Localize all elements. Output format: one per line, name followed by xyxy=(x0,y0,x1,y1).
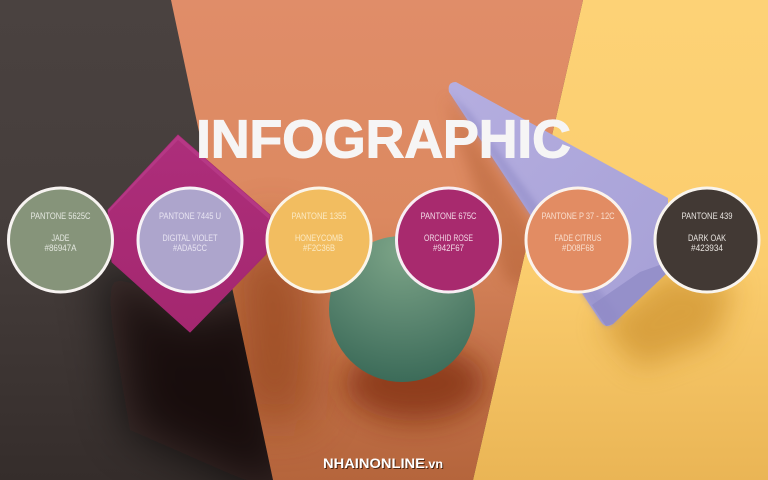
swatch: orchid rose: #942F67 xyxy=(433,243,464,253)
swatch: dark oak: #423934 xyxy=(691,243,723,253)
swatch: orchid rose: ORCHID ROSE xyxy=(424,233,473,243)
panel: orange background xyxy=(171,0,583,480)
swatch: orchid rose xyxy=(396,188,500,292)
swatch: jade: #86947A xyxy=(44,243,76,253)
title: INFOGRAPHIC xyxy=(196,110,571,170)
swatch: digital violet xyxy=(138,188,242,292)
swatch: fade citrus: PANTONE P 37 - 12C xyxy=(542,211,615,221)
panel: dark background xyxy=(0,0,273,480)
swatch: fade citrus: FADE CITRUS xyxy=(554,233,602,243)
swatch: honeycomb: #F2C36B xyxy=(303,243,335,253)
swatch: digital violet: DIGITAL VIOLET xyxy=(162,233,218,243)
swatch: digital violet: PANTONE 7445 U xyxy=(159,211,221,221)
swatch: honeycomb: PANTONE 1355 xyxy=(292,211,346,221)
swatch: fade citrus xyxy=(526,188,630,292)
swatch: honeycomb xyxy=(267,188,371,292)
swatch: dark oak: PANTONE 439 xyxy=(682,211,732,221)
swatch: dark oak: DARK OAK xyxy=(688,233,726,243)
cone shadow on yellow xyxy=(600,270,735,368)
swatch: digital violet: #ADA5CC xyxy=(173,243,207,253)
cone shadow on orange xyxy=(453,115,528,285)
swatch: fade citrus: #D08F68 xyxy=(562,243,594,253)
swatch: jade: PANTONE 5625C xyxy=(30,211,91,221)
sphere shadow xyxy=(345,345,485,421)
icon: green sphere xyxy=(329,236,475,382)
icon: magenta box xyxy=(108,135,270,332)
icon: lavender cone xyxy=(449,82,668,326)
swatch: jade xyxy=(8,188,112,292)
panel: yellow background xyxy=(473,0,768,480)
watermark: NHAINONLINE .vn xyxy=(324,457,444,472)
diamond shadow on orange panel xyxy=(225,220,320,420)
swatch: dark oak xyxy=(655,188,759,292)
swatch: jade: JADE xyxy=(52,233,70,243)
diamond shadow on dark panel xyxy=(100,255,290,480)
swatch: honeycomb: HONEYCOMB xyxy=(295,233,343,243)
swatch: orchid rose: PANTONE 675C xyxy=(420,211,477,221)
watermark: NHAINONLINE .vn xyxy=(323,456,443,471)
